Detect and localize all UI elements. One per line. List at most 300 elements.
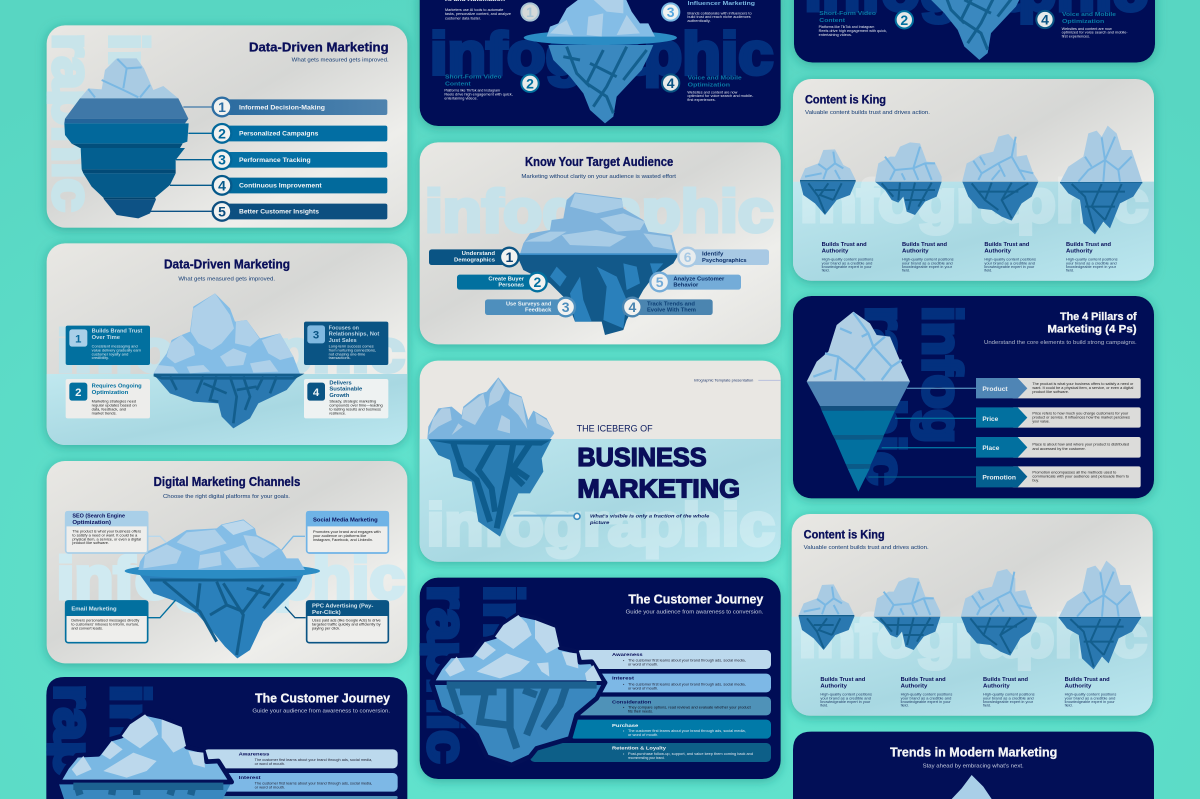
label 2: create buyer personas: Create Buyer [488,276,524,282]
item 1: AI and automation [445,0,539,21]
label 3: use surveys and feedback: 3 [562,299,570,315]
subtitle: Valuable content builds trust and drives action. [805,110,930,116]
iceberg 3 [962,134,1038,221]
callout: email marketing: to customers' inboxes to inform, nurture, [71,622,139,626]
callout line and tagline: picture [589,520,610,525]
item 1: AI and automation: customer data faster. [445,16,481,20]
row 1: informed decision-making: 1 [218,99,226,115]
box 3: focuses on relationships [304,322,388,365]
box 3: focuses on relationships: Focuses on [329,325,359,331]
connector lines [148,536,306,618]
column 1 text: field. [822,269,830,273]
row: promotion: Promotion encompasses all the methods used to [1032,470,1116,474]
item 2: short-form video: 2 [526,75,534,91]
heading: Trends in Modern Marketing [890,746,1057,760]
stage: interest: Interest [239,775,261,781]
panel: customer journey (centre): raphic [416,585,478,763]
box 2: requires ongoing optimization: Marketing strategies need [92,400,136,404]
panel: know your target audience: infographic [425,178,773,245]
column 1 text [822,242,874,273]
column 4 text: Authority [1066,248,1093,254]
item 4: voice and mobile: Voice and Mobile [1062,12,1116,18]
box 1: builds brand trust: Consistent messaging and [92,345,138,349]
panel: content is king (upper) [793,79,1154,282]
label 3: use surveys and feedback: Feedback [525,308,551,314]
column 1 text: High-quality content positions [820,693,873,697]
panel: four pillars of marketing: raphic [855,306,917,485]
column 1 text: your brand as a credible and [820,696,871,700]
column 4 text: knowledgeable expert in your [1066,265,1116,269]
box 4: delivers sustainable growth: 4 [313,387,320,399]
callout: email marketing: Email Marketing [71,607,117,613]
title text [577,424,740,504]
box 3: focuses on relationships: 3 [313,329,319,341]
column 3 text: High-quality content positions [984,258,1037,262]
panel: content is king (upper): infographic [800,168,1148,235]
row: price: product or service. It influences how the market perceives [1032,415,1130,419]
column 3 text: knowledgeable expert in your [984,265,1034,269]
heading: The Customer Journey [255,692,390,706]
iceberg [58,713,232,799]
column 1 text: High-quality content positions [822,258,874,262]
iceberg 2 [875,142,942,215]
row: price: Price refers to how much you charge customers for your [1032,411,1129,415]
panel: title slide: infographic [427,491,775,558]
stage: purchase [570,720,771,739]
row: price [895,407,1141,428]
panel: customer journey (left, cropped by frame): rap [43,684,105,778]
column 2 text: your brand as a credible and [901,696,952,700]
item 2: short-form video [444,75,539,101]
item 2: short-form video: entertaining videos. [819,33,852,37]
box 1: builds brand trust [66,326,150,365]
label 3: use surveys and feedback: Use Surveys and [506,301,551,307]
box 1: builds brand trust: value delivery gradually earn [92,349,141,353]
stage: purchase: The customer first learns about your brand through ads, social media, [628,729,746,733]
subtitle: Marketing without clarity on your audience is wasted effort [521,174,676,180]
iceberg [432,614,605,765]
column 3 text: Builds Trust and [984,242,1029,248]
column 2 text [901,677,953,708]
item 4: voice and mobile [1036,11,1128,38]
callout: PPC advertising [306,600,389,643]
column 3 text [984,242,1037,273]
column 4 text [1065,677,1117,708]
item 4: voice and mobile: 4 [667,75,675,91]
row 2: personalized campaigns [188,124,387,143]
panel: data-driven marketing stacked layers: infog [98,33,160,180]
row: place: and accessed by the customer. [1032,447,1086,451]
callout: social media marketing: Social Media Marketing [313,517,378,523]
callout: SEO: Optimization) [72,520,111,526]
title text: MARKETING [577,476,740,504]
column 4 text: field. [1066,269,1074,273]
panel: content is king (lower): infographic [799,603,1147,670]
box 2: requires ongoing optimization: market trends. [92,411,117,415]
panel: four pillars of marketing [793,296,1154,498]
column 3 text: knowledgeable expert in your [983,700,1033,704]
subtitle: Guide your audience from awareness to conversion. [252,709,390,715]
row: product: want. It could be a physical item, a service, or even a digital [1032,386,1134,390]
heading: Digital Marketing Channels [154,475,300,489]
row 4: continuous improvement [170,176,387,195]
row: place: Place is about how and where your product is distributed [1032,443,1129,447]
callout: social media marketing [306,511,389,553]
stage: awareness: or word of mouth. [255,762,285,766]
row 3: performance tracking: Performance Tracking [239,157,311,164]
column 4 text [1066,242,1118,273]
box 1: builds brand trust: Builds Brand Trust [92,328,143,334]
top label [694,379,781,383]
item 3: influencer marketing: 3 [667,4,675,20]
stage: interest: Interest [612,676,634,682]
row 2: personalized campaigns: Personalized Campaigns [239,131,319,138]
callout: PPC advertising: Per-Click) [312,610,341,616]
stage: awareness: The customer first learns about your brand through ads, social media, [628,659,746,663]
label 5: analyze customer behavior: Behavior [673,283,698,289]
label 4: track trends: Evolve With Them [647,308,696,314]
iceberg 3 [961,569,1037,656]
row: promotion: Promotion [982,475,1016,482]
heading: Content is King [805,93,886,106]
callout: social media marketing: your audience on platforms like [313,534,366,538]
column 2 text [902,242,954,273]
column 4 text: your brand as a credible and [1065,696,1116,700]
label 2: create buyer personas: 2 [533,274,541,290]
label 3: use surveys and feedback [485,298,575,316]
label 2: create buyer personas [457,273,547,291]
column 1 text [820,677,873,708]
item 4: voice and mobile [662,74,753,102]
column 4 text: your brand as a credible and [1066,261,1117,265]
box 4: delivers sustainable growth: Steady, strategic marketing [329,400,376,404]
column 1 text: Builds Trust and [820,677,865,683]
item 1: AI and automation: 1 [526,4,534,20]
column 2 text: Builds Trust and [902,242,947,248]
stage: retention and loyalty: recommending your brand. [628,756,665,760]
panel: digital marketing channels [47,461,407,663]
item 4: voice and mobile: Websites and content are now [1062,27,1112,31]
column 3 text: field. [983,704,991,708]
column 2 text: knowledgeable expert in your [901,700,951,704]
row 5: better customer insights: 5 [218,203,226,219]
item 2: short-form video: Platforms like TikTok and Instagram [819,25,875,29]
label 5: analyze customer behavior: 5 [656,274,664,290]
subtitle: Understand the core elements to build strong campaigns. [984,340,1137,346]
callout: PPC advertising: Uses paid ads (like Google Ads) to drive [312,618,381,622]
stage: consideration: They compare options, read reviews and evaluate whether your product [628,705,751,709]
stage: awareness: Awareness [612,652,643,658]
item 2: short-form video [819,11,913,37]
box 2: requires ongoing optimization: Requires Ongoing [92,384,142,390]
heading: The 4 Pillars of [1060,311,1137,323]
box 3: focuses on relationships: transactions. [329,356,351,360]
heading: Marketing (4 Ps) [1047,324,1137,336]
column 1 text: knowledgeable expert in your [822,265,872,269]
stage: consideration: fits their needs. [628,709,653,713]
label 5: analyze customer behavior [650,273,741,291]
item 3: influencer marketing: Brands collaborate with influencers to [687,11,752,15]
iceberg with disc [125,519,320,658]
callout: SEO: physical item, a service, or even a digital [72,537,141,541]
heading: Know Your Target Audience [525,155,673,169]
column 3 text: field. [984,269,992,273]
column 4 text: High-quality content positions [1065,693,1117,697]
stage: consideration [577,697,771,715]
callout: social media marketing: Promotes your brand and engages with [313,530,381,534]
item 2: short-form video: Reels drive high engagement with quick, [819,29,887,33]
stage: consideration (cropped) [203,796,398,799]
item 1: AI and automation: tasks, personalize content, and analyze [445,12,511,16]
stage: retention and loyalty [530,743,771,762]
box 4: delivers sustainable growth: compounds over time—leading [329,403,383,407]
panel: customer journey (left, cropped by frame): inf [100,684,162,765]
label 6: identify psychographics: Identify [702,252,723,258]
iceberg 1 [799,584,854,650]
panel: digital trends top (cropped): infographic [430,20,773,87]
item 4: voice and mobile: 4 [1041,11,1049,27]
heading: Data-Driven Marketing [249,41,389,55]
box 4: delivers sustainable growth: Sustainable [329,387,362,393]
callout: PPC advertising: targeted traffic quickly and efficiently by [312,622,381,626]
label 1: understand demographics: 1 [505,249,513,265]
item 2: short-form video: Reels drive high engagement with quick, [444,93,513,97]
item 3: influencer marketing: Influencer Marketing [688,1,756,7]
item 4: voice and mobile: optimized for voice search and mobile- [687,94,753,98]
stage: interest: or word of mouth. [255,786,285,790]
stage: interest: or word of mouth. [628,686,658,690]
column 4 text: Builds Trust and [1066,242,1111,248]
row: promotion: communicate with your audience and persuade them to [1032,474,1129,478]
row 4: continuous improvement: Continuous Improvement [239,183,322,190]
box 1: builds brand trust: Over Time [92,335,120,341]
stage: awareness: or word of mouth. [628,663,658,667]
column 2 text: High-quality content positions [901,693,953,697]
row 4: continuous improvement: 4 [218,177,226,193]
stage: retention and loyalty: Retention & Loyalty [612,745,666,751]
item 3: influencer marketing: build trust and reach niche audiences [687,15,751,19]
heading [1047,311,1137,336]
column 4 text: Builds Trust and [1065,677,1110,683]
box 2: requires ongoing optimization [66,379,150,418]
label 4: track trends: 4 [628,299,636,315]
stage: awareness [203,749,398,768]
subtitle: What gets measured gets improved. [178,276,275,282]
layered iceberg [807,312,910,492]
panel: customer journey (centre): infog [473,585,535,732]
heading: The Customer Journey [628,592,763,606]
column 2 text: Authority [902,248,929,254]
label 2: create buyer personas: Personas [498,283,524,289]
layered iceberg [64,58,189,218]
panel: trends in modern marketing (cropped by frame) [793,732,1154,799]
column 1 text: Builds Trust and [822,242,867,248]
row: product: Product [982,386,1008,393]
column 2 text: your brand as a credible and [902,261,953,265]
column 3 text: High-quality content positions [983,693,1035,697]
stage: purchase: or word of mouth. [628,733,658,737]
stage: purchase: Purchase [612,723,639,729]
row: price: Price [982,416,999,423]
callout: PPC advertising: PPC Advertising (Pay- [312,604,374,610]
row: promotion: buy. [1032,479,1039,483]
column 1 text: Authority [822,248,848,254]
callout: SEO: to satisfy a need or want. It could be a [72,533,137,537]
column 4 text: Authority [1065,683,1091,689]
stage: interest [577,674,771,692]
row 5: better customer insights: Better Customer Insights [239,209,319,216]
subtitle: Guide your audience from awareness to conversion. [626,609,763,615]
item 4: voice and mobile: first experiences. [687,98,716,102]
box 3: focuses on relationships: from nurturing connections, [329,348,376,352]
iceberg [427,377,554,537]
panel: title slide [420,361,781,562]
item 3: influencer marketing: authentically. [687,19,711,23]
column 4 text: High-quality content positions [1066,258,1118,262]
stage: retention and loyalty: Post-purchase follow-up, support, and value keep them coming back and [628,752,753,756]
column 1 text: Authority [820,683,847,689]
row: product: product like software. [1032,390,1069,394]
box 3: focuses on relationships: Relationships, Not [329,332,380,338]
row: place [882,437,1141,458]
subtitle: Choose the right digital platforms for your goals. [163,494,290,500]
callout: social media marketing: Instagram, Facebook, and LinkedIn. [313,538,373,542]
panel: data-driven marketing stacked layers [41,25,407,228]
panel: four pillars of marketing: infog [911,306,973,443]
item 4: voice and mobile: first experiences. [1062,34,1090,38]
row 5: better customer insights [150,202,387,221]
panel: data-driven marketing stacked layers: raphic [41,33,103,212]
item 4: voice and mobile: Optimization [1062,19,1105,25]
box 2: requires ongoing optimization: regular updates based on [92,403,137,407]
column 1 text: your brand as a credible and [822,261,873,265]
panel: know your target audience [420,142,781,344]
iceberg [517,192,678,335]
item 2: short-form video: 2 [900,12,908,28]
panel: data-driven marketing four boxes [47,243,407,446]
panel: data-driven marketing four boxes: infographic [57,318,405,385]
box 2: requires ongoing optimization: 2 [75,387,81,399]
column 1 text: field. [820,704,828,708]
stage: awareness: The customer first learns about your brand through ads, social media, [255,758,372,762]
iceberg 2 [874,577,940,650]
stage: awareness: Awareness [239,751,270,757]
row 1: informed decision-making [183,98,387,116]
label 5: analyze customer behavior: Analyze Customer [673,276,724,282]
item 4: voice and mobile: Optimization [688,83,731,89]
item 2: short-form video: Content [819,18,845,24]
row: place: Place [982,445,1000,452]
callout: SEO: product like software. [72,541,109,545]
item 4: voice and mobile: optimized for voice search and mobile- [1062,30,1128,34]
stage: awareness [577,650,771,669]
row: price: your value. [1032,420,1050,424]
panel: digital trends top right (cropped) [794,0,1155,62]
row: product [907,378,1141,398]
panel: customer journey (centre) [416,578,781,779]
subtitle: Valuable content builds trust and drives action. [804,545,929,551]
column 1 text: knowledgeable expert in your [820,700,870,704]
panel: content is king (lower) [792,514,1153,716]
box 4: delivers sustainable growth: Growth [329,393,349,399]
row 3: performance tracking: 3 [218,152,226,168]
title text: BUSINESS [577,444,707,472]
column 3 text: Authority [984,248,1011,254]
callout: PPC advertising: paying per click. [312,626,340,630]
item 2: short-form video: Platforms like TikTok and Instagram [444,89,500,93]
callout: SEO [65,511,148,553]
item 3: influencer marketing [662,1,756,23]
box 2: requires ongoing optimization: Optimization [92,390,128,396]
column 2 text: Authority [901,683,927,689]
iceberg 1 [800,149,856,215]
callout: SEO: SEO (Search Engine [72,514,125,520]
label 1: understand demographics: Understand [462,251,495,257]
box 4: delivers sustainable growth: to lasting results and business [329,407,381,411]
stage: interest: The customer first learns about your brand through ads, social media, [628,682,746,686]
label 1: understand demographics [429,248,519,266]
panel: customer journey (left, cropped by frame) [43,677,407,799]
column 3 text: Builds Trust and [983,677,1028,683]
heading: Data-Driven Marketing [164,258,290,272]
column 2 text: field. [901,704,909,708]
label 4: track trends [623,298,713,316]
iceberg 4 [1059,561,1141,669]
callout line and tagline: What's visible is only a fraction of the whole [590,513,710,518]
column 2 text: Builds Trust and [901,677,946,683]
box 3: focuses on relationships: Long-term success comes [329,344,374,348]
box 3: focuses on relationships: not chasing one-time [329,352,365,356]
subtitle: What gets measured gets improved. [292,58,389,64]
callout: SEO: The product is what your business offers [72,529,141,533]
iceberg with disc [524,0,677,123]
column 2 text: field. [902,269,910,273]
column 4 text: field. [1065,704,1073,708]
box 2: requires ongoing optimization: data, feedback, and [92,407,126,411]
row: promotion [868,466,1141,487]
column 3 text [983,677,1035,708]
column 3 text: Authority [983,683,1010,689]
label 6: identify psychographics [678,248,769,266]
label 1: understand demographics: Demographics [454,258,495,264]
column 2 text: knowledgeable expert in your [902,265,952,269]
column 3 text: your brand as a credible and [983,696,1034,700]
row: product: The product is what your business offers to satisfy a need or [1032,382,1134,386]
callout line and tagline [513,513,710,525]
heading: Content is King [804,528,885,541]
callout: email marketing: Delivers personalized messages directly [71,618,140,622]
box 1: builds brand trust: credibility. [92,356,109,360]
top label: Infographic Template presentation [694,379,754,383]
column 2 text: High-quality content positions [902,258,954,262]
iceberg peak [952,775,992,799]
item 2: short-form video: Short-Form Video [445,75,502,81]
row 2: personalized campaigns: 2 [218,125,226,141]
callout: email marketing [65,600,148,643]
iceberg 4 [1060,126,1142,234]
panel: digital marketing channels: infographic [57,544,405,611]
box 4: delivers sustainable growth: resilience. [329,411,346,415]
callout: email marketing: and convert leads. [71,626,103,630]
item 1: AI and automation: Marketers use AI tools to automate [445,8,503,12]
row 1: informed decision-making: Informed Decision-Making [239,104,325,111]
item 2: short-form video: Content [445,82,471,88]
stage: interest: The customer first learns about your brand through ads, social media, [255,782,372,786]
iceberg underwater [923,0,1028,60]
row 3: performance tracking [176,150,387,169]
column 3 text: your brand as a credible and [984,261,1035,265]
item 2: short-form video: entertaining videos. [444,97,478,101]
